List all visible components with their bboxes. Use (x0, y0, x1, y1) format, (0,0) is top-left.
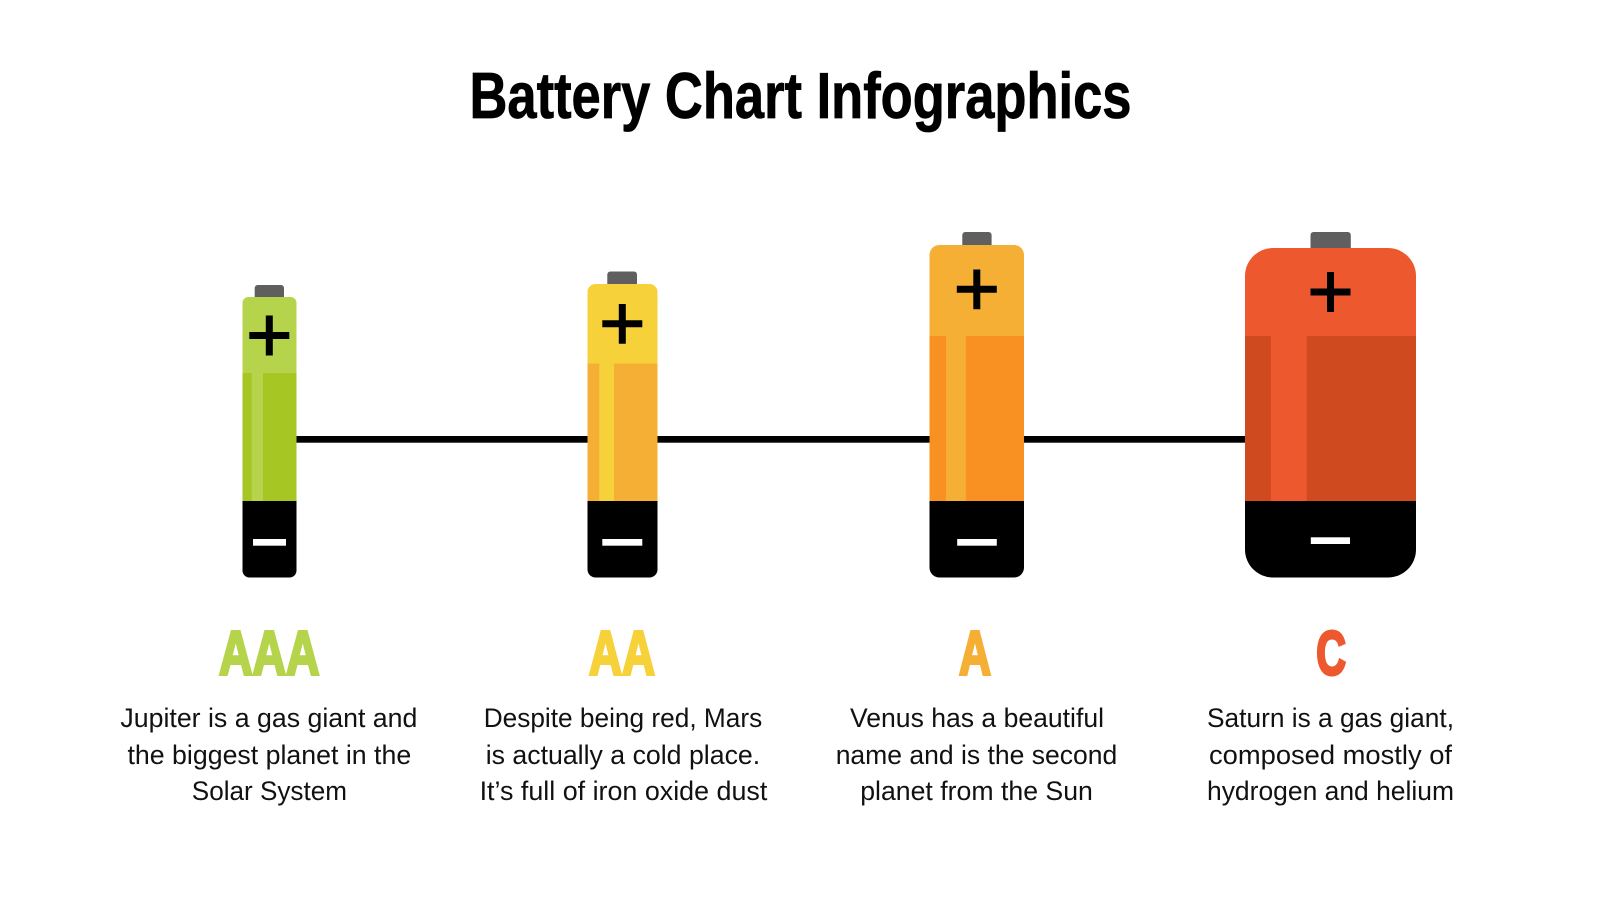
middle section (588, 364, 658, 501)
description: AAA: Jupiter is a gas giant and (120, 703, 417, 733)
middle section (930, 336, 1024, 501)
description: AA: It’s full of iron oxide dust (480, 776, 768, 806)
description: C: Saturn is a gas giant, (1207, 703, 1454, 733)
plus sign (602, 304, 642, 344)
bottom section (930, 501, 1024, 578)
plus sign (249, 316, 289, 356)
description: C: hydrogen and helium (1207, 776, 1454, 806)
description: AA: Despite being red, Mars (484, 703, 762, 733)
top section (242, 297, 296, 373)
terminal cap (607, 272, 637, 285)
label: A: A (959, 620, 991, 688)
description: A: planet from the Sun (860, 776, 1093, 806)
top section (1245, 248, 1416, 336)
description: A: Venus has a beautiful (850, 703, 1104, 733)
description: A: name and is the second (836, 740, 1117, 770)
middle section (1245, 336, 1416, 501)
connecting line (296, 436, 1246, 443)
bottom section (1245, 501, 1416, 578)
minus sign (1311, 537, 1350, 544)
label: AAA: AAA (219, 620, 320, 688)
highlight stripe (252, 373, 263, 501)
description: A (836, 703, 1117, 806)
description: AA: is actually a cold place. (486, 740, 760, 770)
battery: A (930, 232, 1024, 578)
label: C: C (1316, 620, 1346, 688)
terminal cap (962, 232, 992, 246)
description: AAA: Solar System (192, 776, 347, 806)
battery: C (1245, 232, 1416, 578)
battery: AA (588, 272, 658, 578)
description: AA (480, 703, 768, 806)
label: AA: AA (589, 620, 655, 688)
terminal cap (1310, 232, 1351, 249)
highlight stripe (946, 336, 966, 501)
highlight stripe (599, 364, 614, 501)
terminal cap (255, 285, 284, 298)
description: C (1207, 703, 1454, 806)
middle section (242, 373, 296, 501)
highlight stripe (1271, 336, 1307, 501)
title: Battery Chart Infographics (470, 59, 1132, 132)
plus sign (1310, 272, 1350, 312)
minus sign (957, 539, 997, 546)
bottom section (588, 501, 658, 578)
description: AAA (120, 703, 417, 806)
top section (588, 284, 658, 364)
plus sign (957, 270, 997, 309)
minus sign (602, 539, 642, 546)
description: C: composed mostly of (1209, 740, 1452, 770)
top section (930, 245, 1024, 336)
battery: AAA (242, 285, 296, 578)
bottom section (242, 501, 296, 578)
description: AAA: the biggest planet in the (128, 740, 411, 770)
minus sign (253, 539, 286, 546)
